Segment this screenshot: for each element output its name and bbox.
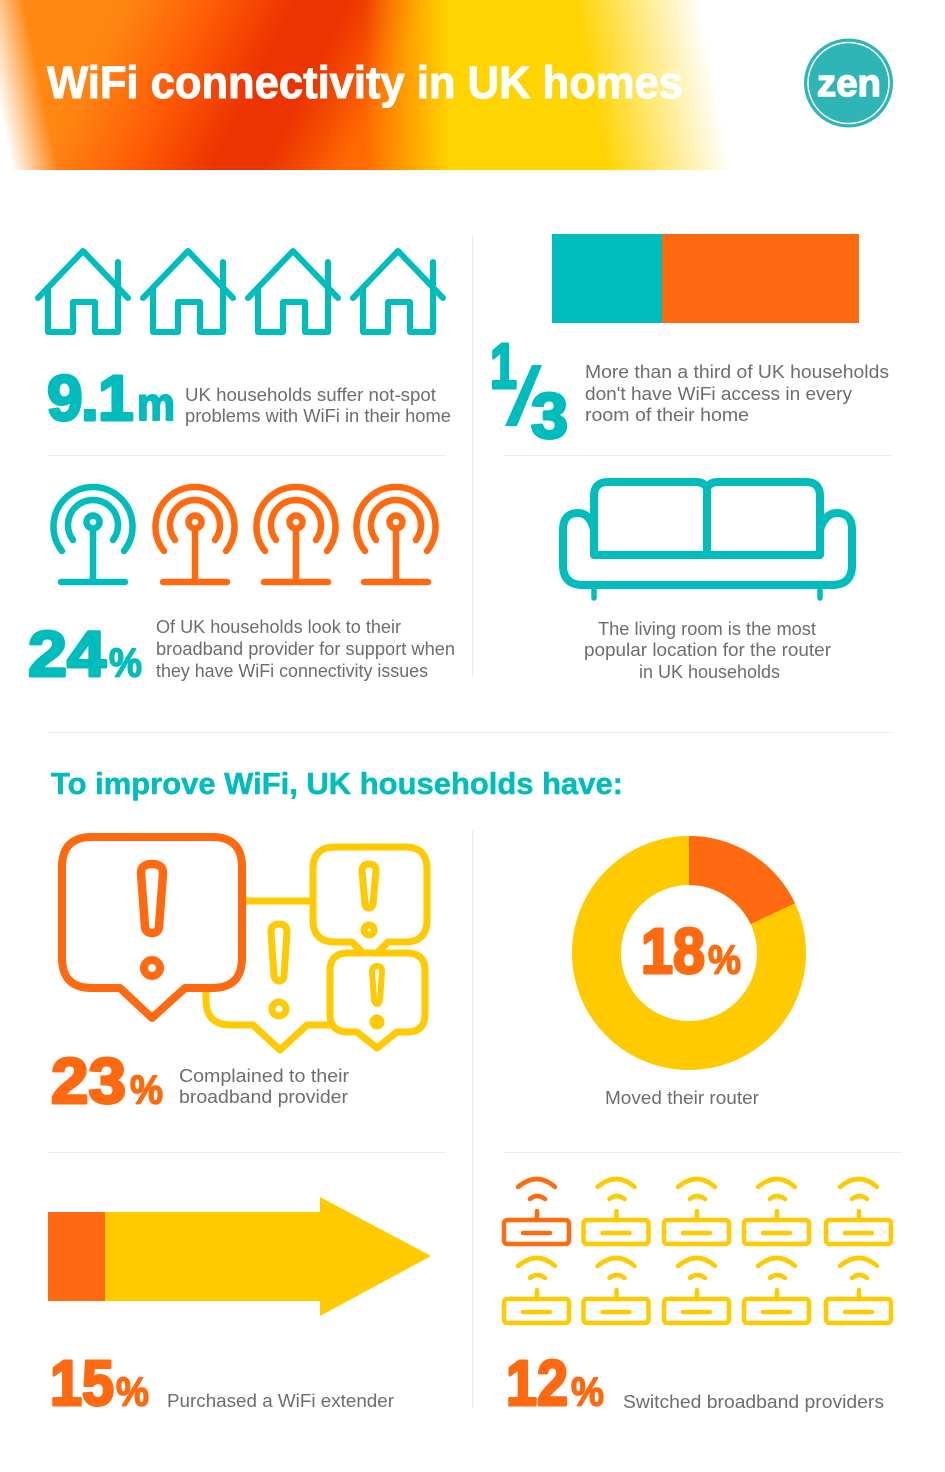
stat: 23%: % (130, 1066, 163, 1112)
stat: 24%: % (109, 640, 142, 686)
text: living room description: in UK households (639, 662, 780, 682)
section heading: To improve WiFi, UK households have: (51, 766, 623, 801)
text: one third description: room of their home (585, 405, 749, 425)
panel: 18% moved router (596, 836, 795, 1108)
chart: donut 18% (596, 836, 795, 1046)
text: one third description (585, 362, 889, 425)
text: not-spot description: UK households suffer not-spot (185, 385, 436, 405)
text: extender: Purchased a WiFi extender (167, 1391, 394, 1411)
stat: 18%: % (708, 936, 741, 982)
icon: alert speech bubbles (62, 837, 427, 1050)
divider lines (48, 235, 902, 1408)
panel: 24% broadband support (28, 487, 455, 690)
panel: one third of households (490, 234, 889, 452)
panel: living room (563, 482, 852, 682)
text: complained description (179, 1066, 349, 1107)
stat: 12%: % (571, 1368, 604, 1414)
stat: 24% (28, 618, 142, 690)
text: complained description: Complained to their (179, 1066, 349, 1086)
panel: 23% complained (51, 837, 427, 1117)
stat: 23% (51, 1045, 163, 1117)
panel: 9.1m households (38, 251, 451, 434)
icon: sofa (563, 482, 852, 598)
bar: one third split (552, 234, 859, 323)
panel: 12% switched providers (504, 1179, 891, 1419)
stat: 15%: 15 (50, 1347, 114, 1419)
text: not-spot description: problems with WiFi in their home (185, 406, 451, 426)
stat: 15%: % (116, 1368, 149, 1414)
text: complained description: broadband provider (179, 1087, 348, 1107)
text: one third description: More than a third of UK households (585, 362, 889, 382)
text: living room description: popular location for the router (584, 640, 831, 660)
icon: four houses (38, 251, 443, 332)
header banner (0, 0, 800, 170)
text: support description: broadband provider for support when (156, 639, 455, 659)
text: moved router: Moved their router (605, 1088, 759, 1108)
icon: ten routers (504, 1179, 891, 1323)
text: support description (156, 617, 455, 681)
stat: 24%: 24 (28, 618, 106, 690)
stat: 9.1m: 9.1 (47, 362, 134, 434)
stat: 1/3 (490, 330, 568, 452)
zen logo (804, 38, 893, 128)
stat: 9.1m: m (137, 378, 175, 430)
stat: 9.1m (47, 362, 175, 434)
panel: 15% WiFi extender (48, 1197, 431, 1419)
text: switched: Switched broadband providers (623, 1392, 884, 1412)
zen logo: zen (817, 63, 881, 105)
text: living room description (584, 619, 831, 682)
text: support description: they have WiFi connectivity issues (156, 661, 428, 681)
stat: 23%: 23 (51, 1045, 126, 1117)
text: not-spot description (185, 385, 451, 426)
stat: 1/3: 3 (531, 380, 568, 452)
chart: arrow 15% (48, 1197, 431, 1316)
text: one third description: don't have WiFi access in every (585, 384, 852, 404)
icon: four antennas (53, 487, 435, 582)
stat: 12%: 12 (506, 1347, 568, 1419)
stat: 1/3: 1 (490, 330, 517, 402)
text: support description: Of UK households look to their (156, 617, 401, 637)
stat: 18%: 18 (641, 915, 705, 987)
title: WiFi connectivity in UK homes (47, 57, 683, 108)
text: living room description: The living room is the most (598, 619, 816, 639)
